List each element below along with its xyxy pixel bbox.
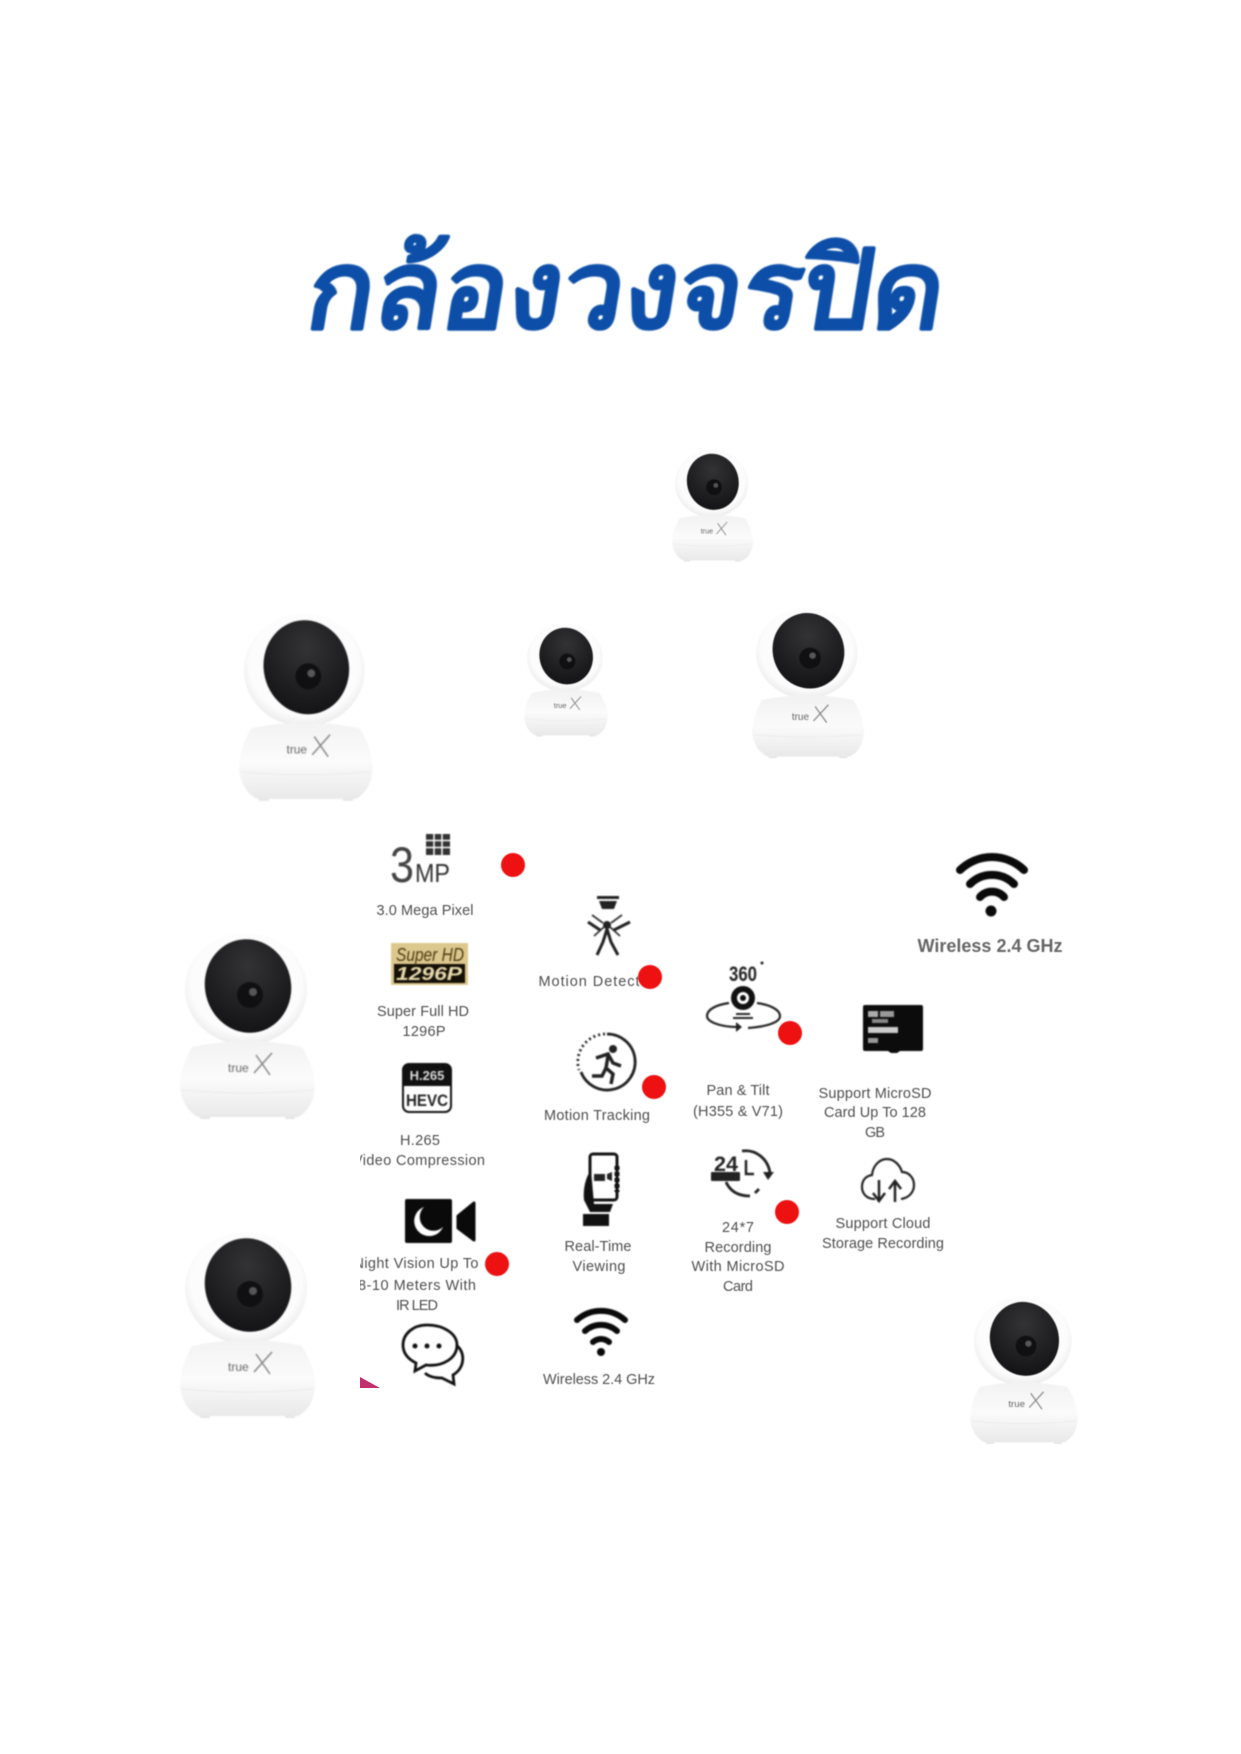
dot: [778, 1021, 802, 1045]
icon: motion detection: [588, 896, 630, 955]
icon: Super HD: Super HD: [396, 945, 464, 965]
label: H.265 Video Compression: [353, 1133, 485, 1169]
icon: chat bubbles: [403, 1325, 463, 1384]
label: Support MicroSD: GB: [865, 1125, 885, 1141]
label: Night Vision: [360, 1256, 478, 1311]
label: Pan and Tilt: [693, 1083, 783, 1120]
icon: large wifi: [960, 857, 1024, 916]
icon: H.265 HEVC: H.265: [410, 1068, 444, 1083]
icon: H.265 HEVC: [403, 1064, 451, 1112]
label: 24*7 recording: Card: [723, 1279, 753, 1295]
icon: phone in hand: [583, 1154, 617, 1226]
label: Real-Time Viewing: Viewing: [572, 1259, 626, 1275]
icon: microSD card: [863, 1005, 923, 1053]
camera: small top: true: [701, 526, 713, 535]
dot: [485, 1252, 509, 1276]
label: Support Cloud: Support Cloud: [836, 1216, 930, 1232]
icon: Super HD: [391, 943, 468, 985]
icon: cloud: [862, 1159, 914, 1202]
pink triangle fragment: [360, 1377, 380, 1388]
camera: upper left: true: [287, 743, 307, 757]
label: Super Full HD: 1296P: [402, 1024, 446, 1040]
label: Support MicroSD: [818, 1086, 932, 1141]
icon: wifi: [577, 1311, 625, 1356]
camera: lower left: true: [228, 1360, 249, 1374]
camera: upper right: [752, 606, 864, 758]
label: Support MicroSD: Card Up To 128: [824, 1105, 926, 1121]
icon: motion tracking: [578, 1034, 635, 1090]
label: H.265 Video Compression: H.265: [400, 1133, 440, 1149]
label: Motion Detection (partly hidden): Motion Detect: [538, 974, 640, 990]
label: 24*7 recording: [692, 1220, 784, 1295]
camera: lower left: [180, 1229, 315, 1418]
dot: [638, 965, 662, 989]
label: large Wireless 2.4 GHz: Wireless 2.4 GHz: [918, 936, 1062, 956]
camera: small middle: true: [554, 701, 567, 710]
label: Support Cloud: Storage Recording: [822, 1236, 944, 1252]
icon: 3MP: 3: [390, 837, 414, 893]
label: Night Vision: 8-10 Meters With: [358, 1278, 476, 1294]
icon: H.265 HEVC: HEVC: [406, 1091, 448, 1110]
label: Pan and Tilt: Pan & Tilt: [706, 1083, 770, 1099]
label: Night Vision: IR LED: [396, 1298, 438, 1314]
label: Real-Time Viewing: [564, 1239, 632, 1275]
label: Motion Tracking: Motion Tracking: [544, 1108, 650, 1124]
icon: 360 pan tilt: [707, 962, 780, 1032]
icon: night vision camera: [405, 1199, 474, 1243]
icon: 24 hour: [711, 1151, 774, 1196]
icon: 3MP: MP: [415, 858, 450, 888]
label: 24*7 recording: Recording: [704, 1240, 772, 1256]
label: Super Full HD: [377, 1004, 469, 1040]
label: 24*7 recording: 24*7: [722, 1220, 754, 1236]
label: Support Cloud: [822, 1216, 944, 1252]
camera: mid left: [180, 930, 315, 1119]
label: Pan and Tilt: (H355 & V71): [693, 1104, 783, 1120]
camera: lower right: true: [1008, 1399, 1025, 1410]
label: Night Vision: Night Vision Up To: [354, 1256, 478, 1272]
dot: [775, 1200, 799, 1224]
title: กล้องวงจรปิด: [299, 230, 955, 352]
icon: Super HD: 1296P: [396, 964, 463, 984]
icon: 3MP: [390, 834, 450, 893]
camera: upper left: [239, 611, 373, 801]
camera: small top: [672, 448, 753, 562]
label: Real-Time Viewing: Real-Time: [564, 1239, 632, 1255]
camera: small middle: [524, 622, 608, 737]
icon: 360 pan tilt: 360: [729, 963, 757, 986]
label: Super Full HD: Super Full HD: [377, 1004, 469, 1020]
camera: mid left: true: [228, 1061, 249, 1075]
label: Wireless 2.4 GHz: Wireless 2.4 GHz: [543, 1372, 655, 1388]
camera: lower right: [970, 1295, 1078, 1444]
camera: upper right: true: [792, 712, 810, 723]
label: 24*7 recording: With MicroSD: [692, 1259, 784, 1275]
icon: 24 hour: 24: [714, 1153, 738, 1176]
label: 3.0 Mega Pixel: 3.0 Mega Pixel: [376, 903, 474, 919]
label: H.265 Video Compression: Video Compression: [353, 1153, 485, 1169]
dot: [642, 1075, 666, 1099]
dot: [501, 853, 525, 877]
label: Support MicroSD: Support MicroSD: [818, 1086, 932, 1102]
